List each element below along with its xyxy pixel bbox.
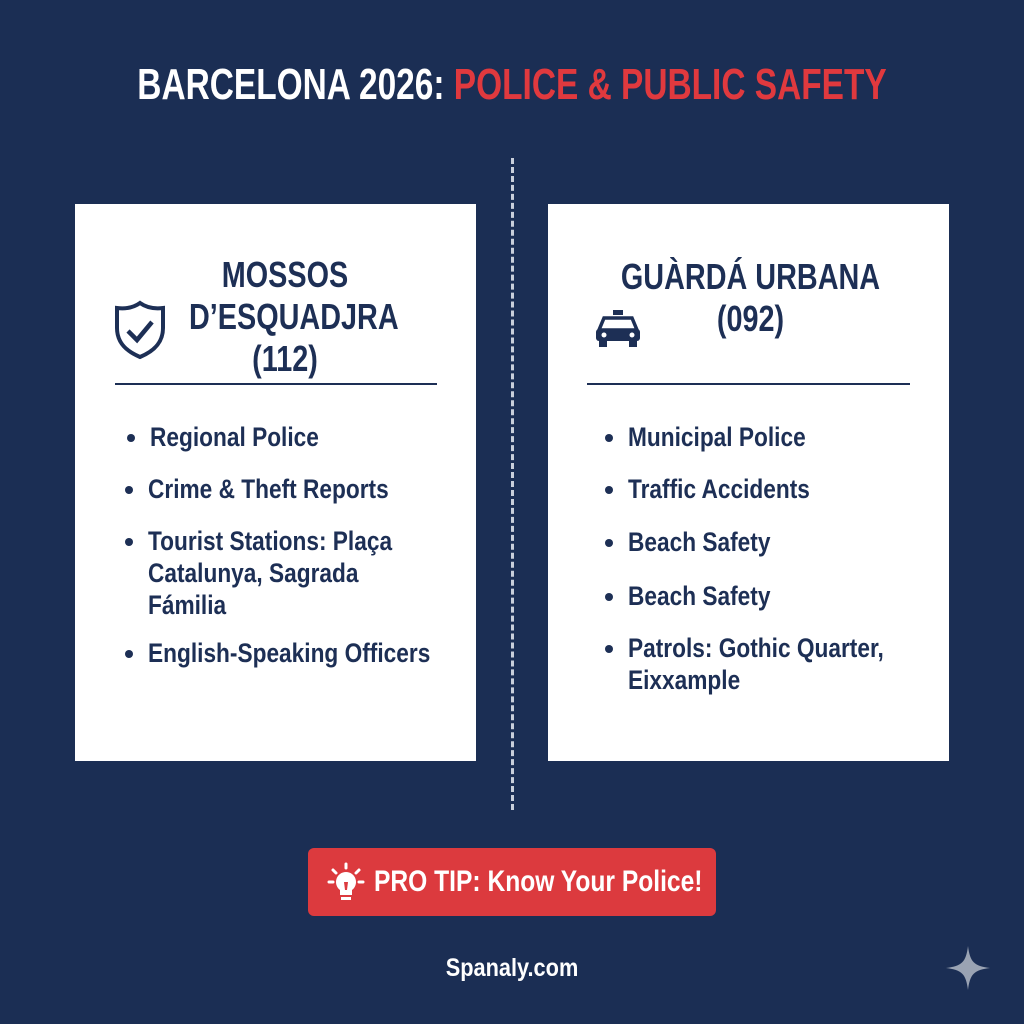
bullet list: Catalunya, Sagrada [148, 558, 358, 588]
bullet list [125, 422, 430, 668]
bullet list: Tourist Stations: Plaçа [148, 526, 392, 556]
bullet list: Regional Police [150, 422, 319, 452]
bullet list: Eixxample [628, 665, 740, 695]
heading: MOSSOS [222, 254, 348, 295]
heading [189, 254, 399, 379]
panel: Guardia Urbana [548, 204, 949, 761]
callout: pro tip [308, 848, 716, 916]
bullet list: Beach Safety [628, 581, 770, 611]
callout: pro tip: PRO TIP: Know Your Police! [374, 865, 702, 898]
panel: Mossos d'Esquadra [75, 204, 476, 761]
bullet list: Traffic Accidents [628, 474, 810, 504]
bullet list: Municipal Police [628, 422, 806, 452]
heading: (112) [252, 338, 318, 379]
heading: (092) [717, 298, 784, 339]
heading: D’ESQUADJRA [189, 296, 399, 337]
bullet list: Patrols: Gothic Quarter, [628, 633, 884, 663]
bullet list: English-Speaking Officers [148, 638, 430, 668]
divider dashed line [511, 158, 514, 810]
icon: shield [115, 300, 165, 360]
heading: GUÀRDÁ URBANA [621, 256, 880, 297]
bullet list: Beach Safety [628, 527, 770, 557]
icon: light bulb [328, 862, 364, 900]
title: BARCELONA 2026: POLICE & PUBLIC SAFETY [137, 60, 887, 109]
bullet list [605, 422, 884, 695]
heading [621, 256, 880, 339]
icon: sparkle [946, 946, 990, 990]
footer: website: Spanaly.com [446, 954, 578, 982]
bullet list: Crime & Theft Reports [148, 474, 389, 504]
bullet list: Fámilia [148, 590, 226, 620]
icon: police car [596, 310, 640, 347]
